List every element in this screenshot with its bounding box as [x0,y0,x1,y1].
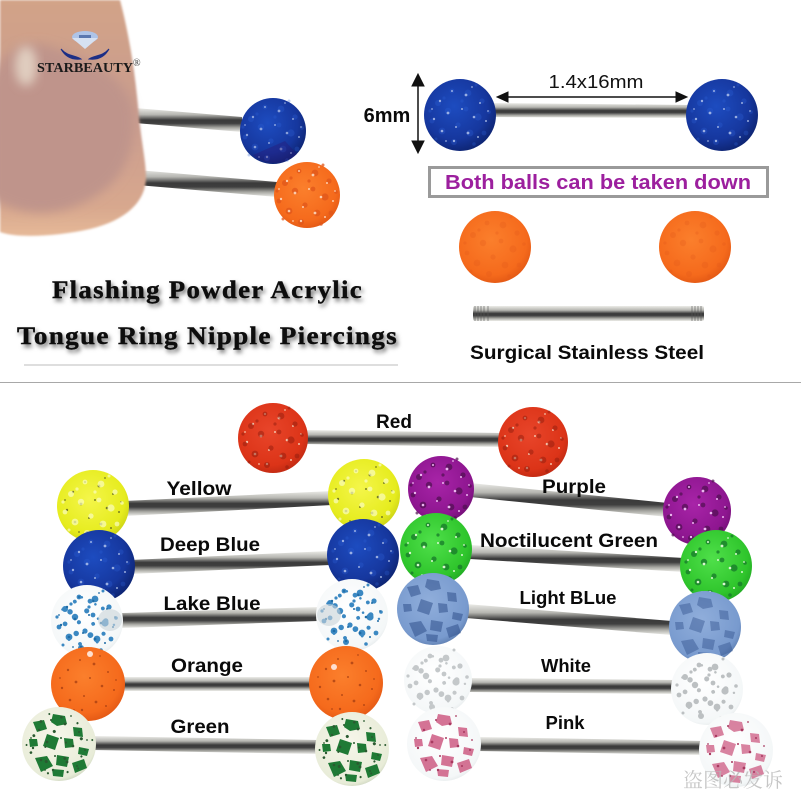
logo: Starbeauty [37,31,141,76]
photo: fingers holding two barbells [0,0,340,236]
variant: Green: Green [170,716,230,738]
label: ball diameter: 6mm [364,105,410,127]
variant: Pink: Pink [546,713,586,733]
parts: separate balls and bar [459,211,731,364]
variant: Deep Blue [63,519,399,602]
variant: Lake Blue: Lake Blue [164,593,261,615]
variant: Yellow [57,459,400,542]
colour variants [17,403,773,791]
ball: blue in hand [240,98,306,164]
icon: diamond [72,31,98,49]
watermark: 盗图必发诉 [683,769,783,792]
ball: orange in hand [274,162,340,228]
variant: Noctilucent Green [400,513,752,602]
bar [490,103,692,118]
variant: Pink [407,707,773,787]
ball: blue left [424,79,496,151]
variant: Light Blue [397,573,741,663]
label: bar size: 1.4x16mm [548,72,644,92]
brand name: STARBEAUTY [37,61,133,76]
threaded steel bar [473,306,704,321]
arrow: 6mm height [412,74,424,153]
variant: Purple [408,456,731,545]
variant: Green [17,701,395,791]
variant: Red [238,403,568,477]
title line 2: Tongue Ring Nipple Piercings [17,323,398,350]
callout: removable balls: Both balls can be taken down [445,172,751,194]
finger [0,0,146,236]
variant: Deep Blue: Deep Blue [160,534,260,556]
fingernail [0,44,133,213]
variant: Light Blue: Light BLue [520,588,616,608]
ball: blue right [686,79,758,151]
variant: Purple: Purple [542,476,606,498]
icon: wings [61,49,109,59]
variant: Yellow: Yellow [166,478,232,500]
variant: Red: Red [376,412,412,433]
variant: Orange [51,646,383,721]
ball: orange right [659,211,731,283]
bar: lower barbell in fingers [125,169,277,197]
arrow: bar length [497,92,687,102]
diagram: size specifications [364,72,758,153]
variant: White: White [541,656,591,676]
callout: removable balls [430,168,768,196]
registered mark: ® [133,58,141,69]
bar: top barbell in fingers [135,108,242,132]
title line 1: Flashing Powder Acrylic [52,277,363,304]
title [17,277,398,350]
variant: White [404,646,743,725]
ball: orange left [459,211,531,283]
label: material: Surgical Stainless Steel [470,343,704,364]
nail highlight [15,46,37,86]
variant: Noctilucent Green: Noctilucent Green [480,530,658,552]
variant: Lake Blue [51,579,388,657]
variant: Orange: Orange [171,655,243,677]
